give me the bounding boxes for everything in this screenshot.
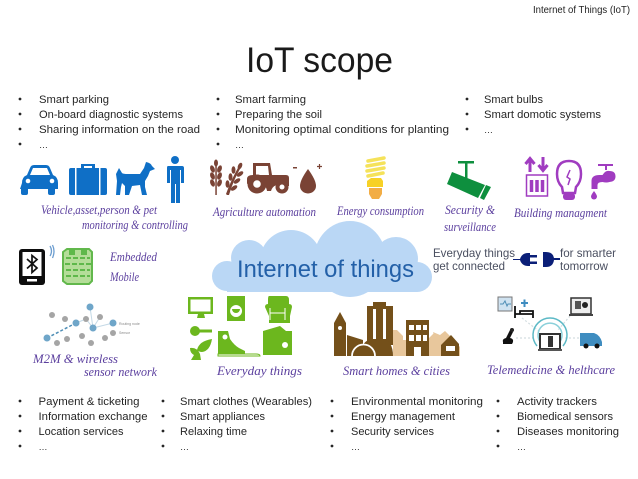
tagline: everyday things: Everyday things	[433, 246, 515, 260]
bullet list: health: Biomedical sensors	[517, 411, 614, 423]
title: IoT scope	[246, 41, 393, 80]
chart: sensor network	[44, 304, 140, 346]
label: m2m and wireless	[32, 352, 157, 379]
label: m2m and wireless: M2M & wireless	[32, 352, 118, 366]
label: m2m and wireless: sensor network	[84, 365, 157, 379]
label: smart homes and cities: Smart homes & cities	[343, 364, 450, 378]
bullet list: energy: Smart domotic systems	[484, 109, 602, 121]
icon: dog	[116, 162, 155, 195]
label: everyday things: Everyday things	[216, 364, 302, 378]
bullet list: vehicle: Sharing information on the road	[39, 124, 200, 136]
bullet list: agriculture: Monitoring optimal conditions for planting	[235, 124, 449, 136]
bullet list: environmental	[331, 396, 483, 452]
icon group: everyday things	[188, 296, 292, 360]
icon: wheat	[209, 160, 244, 195]
label: embedded mobile: Mobile	[109, 270, 139, 284]
icon: suitcase	[69, 164, 107, 195]
label: embedded mobile	[109, 250, 158, 284]
bullet list: vehicle	[19, 94, 200, 150]
label: security: surveillance	[444, 220, 496, 234]
bullet list: payments: Location services	[38, 426, 124, 438]
bullet list: payments: Payment & ticketing	[38, 396, 140, 408]
icon: bluetooth phone	[19, 245, 54, 285]
bullet list: environmental: Energy management	[351, 411, 455, 423]
label: vehicle monitoring: monitoring & controlling	[82, 218, 188, 232]
bullet list: wearables	[162, 396, 312, 452]
cloud label: Internet of things	[237, 256, 414, 283]
bullet list: agriculture: Preparing the soil	[235, 109, 322, 121]
tagline: everyday things	[433, 246, 616, 273]
header label: Internet of Things (IoT)	[533, 5, 630, 16]
label: agriculture automation: Agriculture automation	[212, 205, 316, 219]
label: building management: Building managment	[514, 206, 607, 220]
bullet list: wearables: Smart clothes (Wearables)	[180, 396, 312, 408]
label: security: Security &	[445, 203, 495, 217]
bullet list: energy: …	[484, 125, 493, 135]
bullet list: wearables: Smart appliances	[180, 411, 265, 423]
bullet list: wearables: Relaxing time	[180, 426, 247, 438]
bullet list: vehicle: On-board diagnostic systems	[39, 109, 184, 121]
bullet list: environmental: Environmental monitoring	[351, 396, 483, 408]
bullet list: agriculture: …	[235, 140, 244, 150]
bullet list: wearables: …	[180, 442, 189, 452]
icon: soil drop	[293, 164, 322, 194]
bullet list: payments: …	[38, 442, 48, 452]
icon: energy bulb	[367, 158, 384, 199]
bullet list: environmental: …	[351, 442, 360, 452]
bullet list: health: …	[517, 442, 526, 452]
label: telemedicine and healthcare: Telemedicine & helthcare	[487, 363, 615, 377]
bullet list: energy: Smart bulbs	[484, 94, 543, 106]
bullet list: health	[497, 396, 619, 452]
icon: plug	[513, 252, 560, 267]
label: security	[444, 203, 496, 234]
icon: car	[20, 165, 58, 195]
icon: tap	[591, 164, 616, 200]
bullet list: vehicle: Smart parking	[39, 94, 109, 106]
bullet list: agriculture: Smart farming	[235, 94, 306, 106]
label: embedded mobile: Embedded	[109, 250, 158, 264]
bullet list: health: Diseases monitoring	[517, 426, 619, 438]
icon: security camera	[447, 161, 491, 200]
chart: sensor network: Routing node	[119, 322, 140, 326]
tagline: everyday things: for smarter	[560, 246, 616, 260]
bullet list: payments: Information exchange	[38, 411, 148, 423]
cloud	[212, 221, 432, 297]
icon: idea bulb	[557, 161, 581, 200]
icon: smart homes and cities	[334, 302, 460, 356]
chart: sensor network: Sensor	[119, 331, 131, 335]
label: energy consumption: Energy consumption	[336, 204, 424, 218]
tagline: everyday things: tomorrow	[560, 259, 608, 273]
tagline: everyday things: get connected	[433, 259, 505, 273]
bullet list: payments	[19, 396, 147, 452]
bullet list: agriculture	[217, 94, 449, 150]
bullet list: vehicle: …	[39, 140, 48, 150]
icon: person	[167, 156, 184, 203]
label: vehicle monitoring	[41, 203, 188, 232]
icon: tractor	[247, 163, 289, 194]
icon: embedded chip	[63, 249, 92, 284]
bullet list: environmental: Security services	[351, 426, 434, 438]
label: vehicle monitoring: Vehicle,asset,person & pet	[41, 203, 157, 217]
bullet list: health: Activity trackers	[517, 396, 598, 408]
bullet list: energy	[466, 94, 602, 135]
icon: lift	[526, 157, 548, 196]
icon: telemedicine network	[498, 297, 602, 351]
